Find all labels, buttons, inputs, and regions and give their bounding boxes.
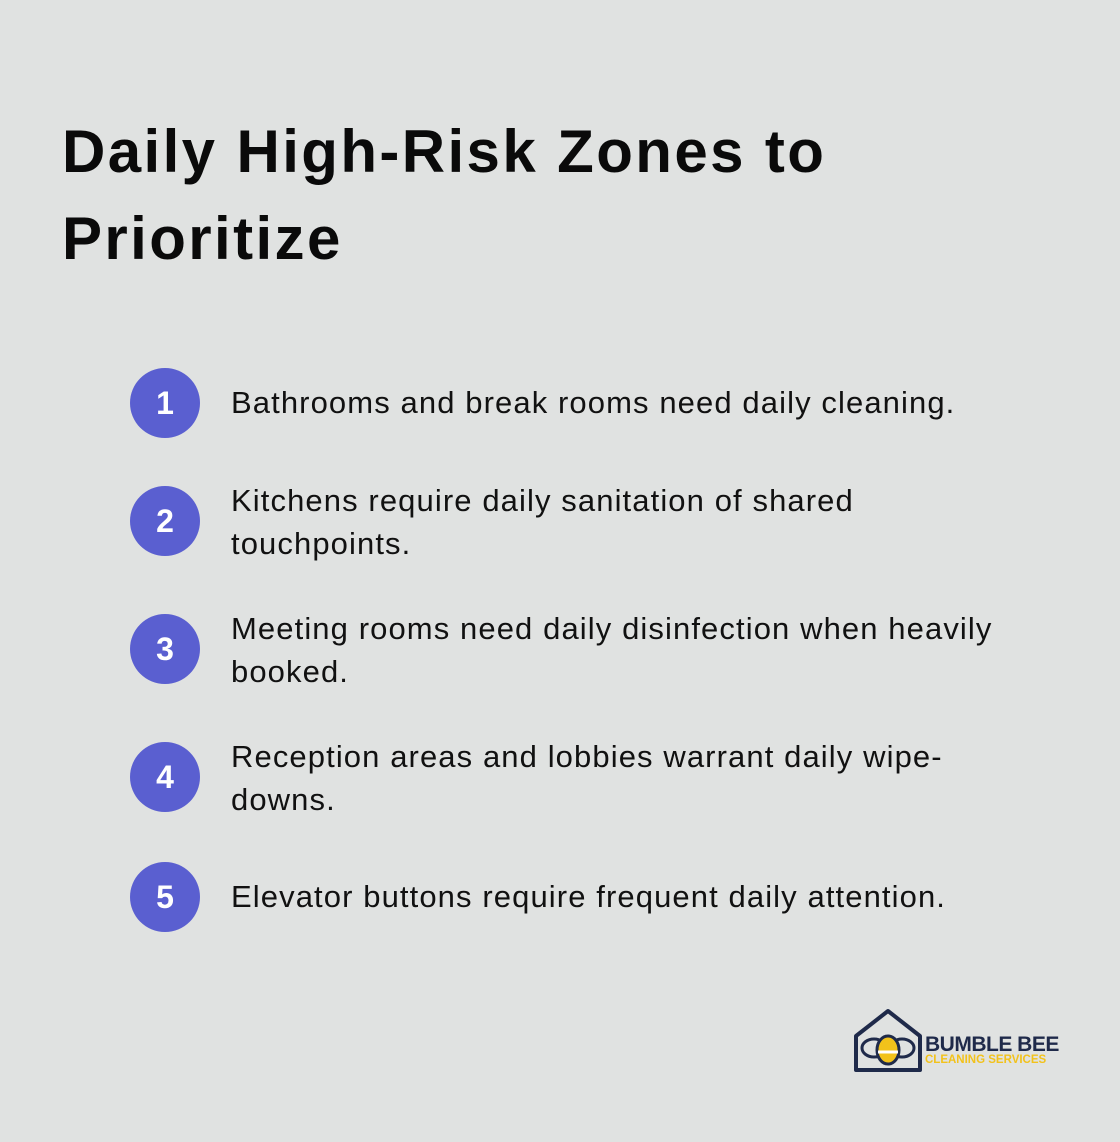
logo: CLEANING SERVICES bbox=[925, 1054, 1046, 1066]
item 3: 3 bbox=[156, 631, 174, 667]
item 5 bbox=[130, 862, 946, 932]
item 1: 1 bbox=[156, 385, 174, 421]
item 4: 4 bbox=[156, 759, 174, 795]
item 1: Bathrooms and break rooms need daily cleaning. bbox=[231, 385, 955, 420]
item 1 bbox=[130, 368, 955, 438]
item 4: Reception areas and lobbies warrant daily wipe- bbox=[231, 739, 943, 774]
title: Prioritize bbox=[62, 205, 343, 272]
icon: bee house bbox=[854, 1009, 922, 1072]
item 5: Elevator buttons require frequent daily attention. bbox=[231, 879, 946, 914]
logo bbox=[854, 1009, 1059, 1072]
item 2: touchpoints. bbox=[231, 526, 411, 561]
item 2: Kitchens require daily sanitation of shared bbox=[231, 483, 854, 518]
item 2: 2 bbox=[156, 503, 174, 539]
item 4 bbox=[130, 739, 943, 817]
title: Daily High-Risk Zones to bbox=[62, 118, 826, 185]
title bbox=[62, 118, 826, 272]
item 3 bbox=[130, 611, 993, 689]
item 5: 5 bbox=[156, 879, 174, 915]
logo text: BUMBLE BEE bbox=[925, 1033, 1059, 1056]
item 2 bbox=[130, 483, 854, 561]
item 3: booked. bbox=[231, 654, 349, 689]
item 4: downs. bbox=[231, 782, 336, 817]
item 3: Meeting rooms need daily disinfection when heavily bbox=[231, 611, 993, 646]
